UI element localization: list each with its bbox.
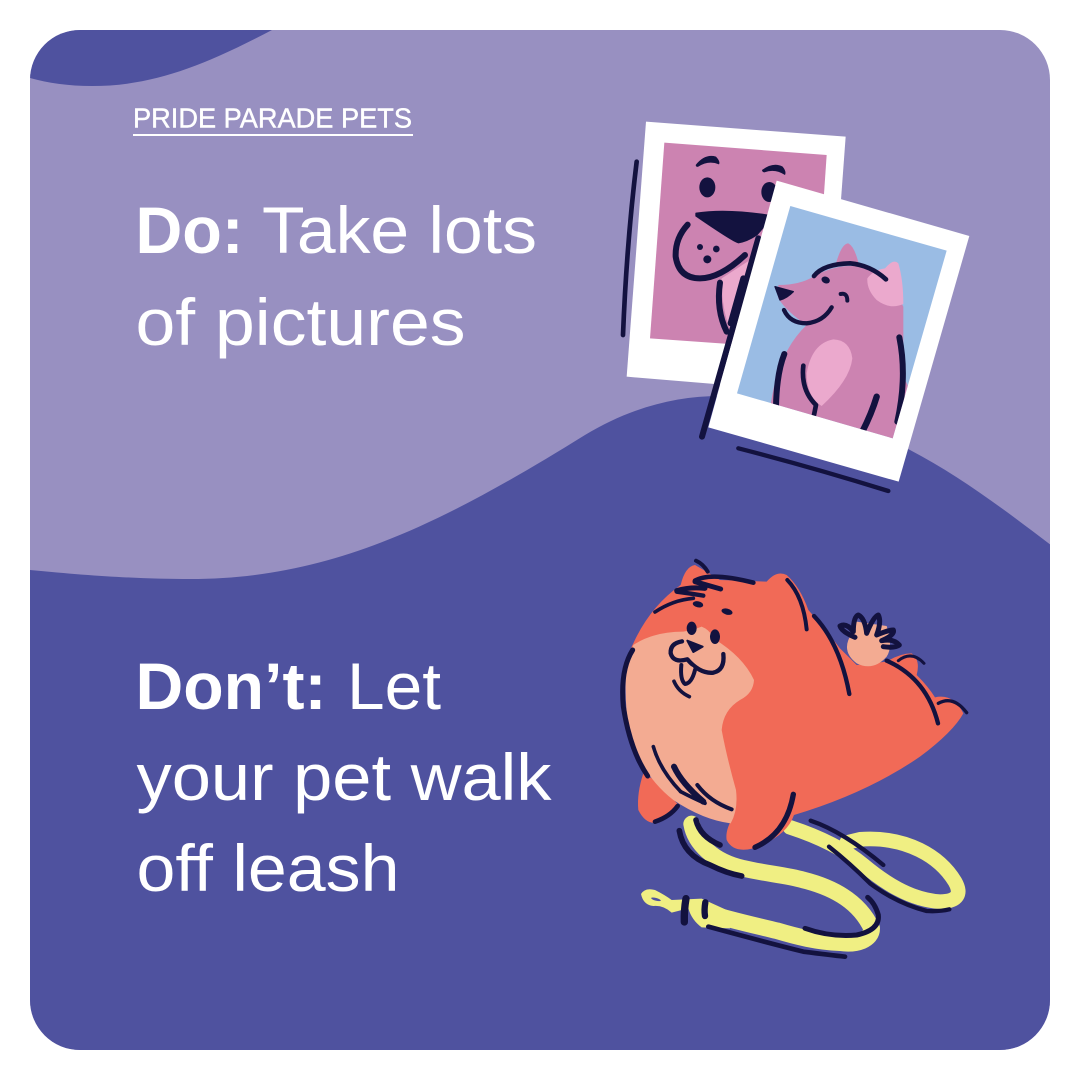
polaroid edge shadow line — [702, 238, 758, 437]
top-left corner wave — [30, 30, 272, 86]
text: don't tip: your pet walk — [136, 740, 553, 814]
dog body — [627, 565, 963, 850]
heading: Pride Parade Pets: PRIDE PARADE PETS — [133, 102, 412, 134]
text: do tip: Take lots — [262, 193, 537, 267]
text: do tip — [136, 193, 537, 359]
illustration: leash — [641, 820, 958, 957]
lower wave panel — [20, 396, 1060, 1060]
illustration: two pet polaroids — [623, 122, 969, 491]
polaroid: side-profile dog — [708, 181, 969, 482]
polaroid: front-facing dog — [623, 122, 846, 393]
fur strokes — [623, 561, 967, 847]
raised paw — [847, 622, 890, 666]
leash outlines — [679, 820, 949, 957]
text: do tip: of pictures — [136, 285, 466, 359]
text: don't tip: Let — [347, 649, 441, 723]
paw fingers — [840, 615, 899, 647]
text: don't tip: off leash — [136, 831, 400, 905]
floor stroke under polaroid — [738, 448, 888, 491]
back foot — [638, 773, 678, 823]
text: don't tip: Don’t: — [136, 649, 326, 723]
text: don't tip — [136, 649, 553, 905]
face — [671, 600, 733, 697]
illustration: fluffy orange dog — [623, 561, 967, 850]
dog chest and face patch — [626, 627, 754, 823]
text: do tip: Do: — [136, 193, 244, 267]
leash strap — [641, 824, 958, 943]
